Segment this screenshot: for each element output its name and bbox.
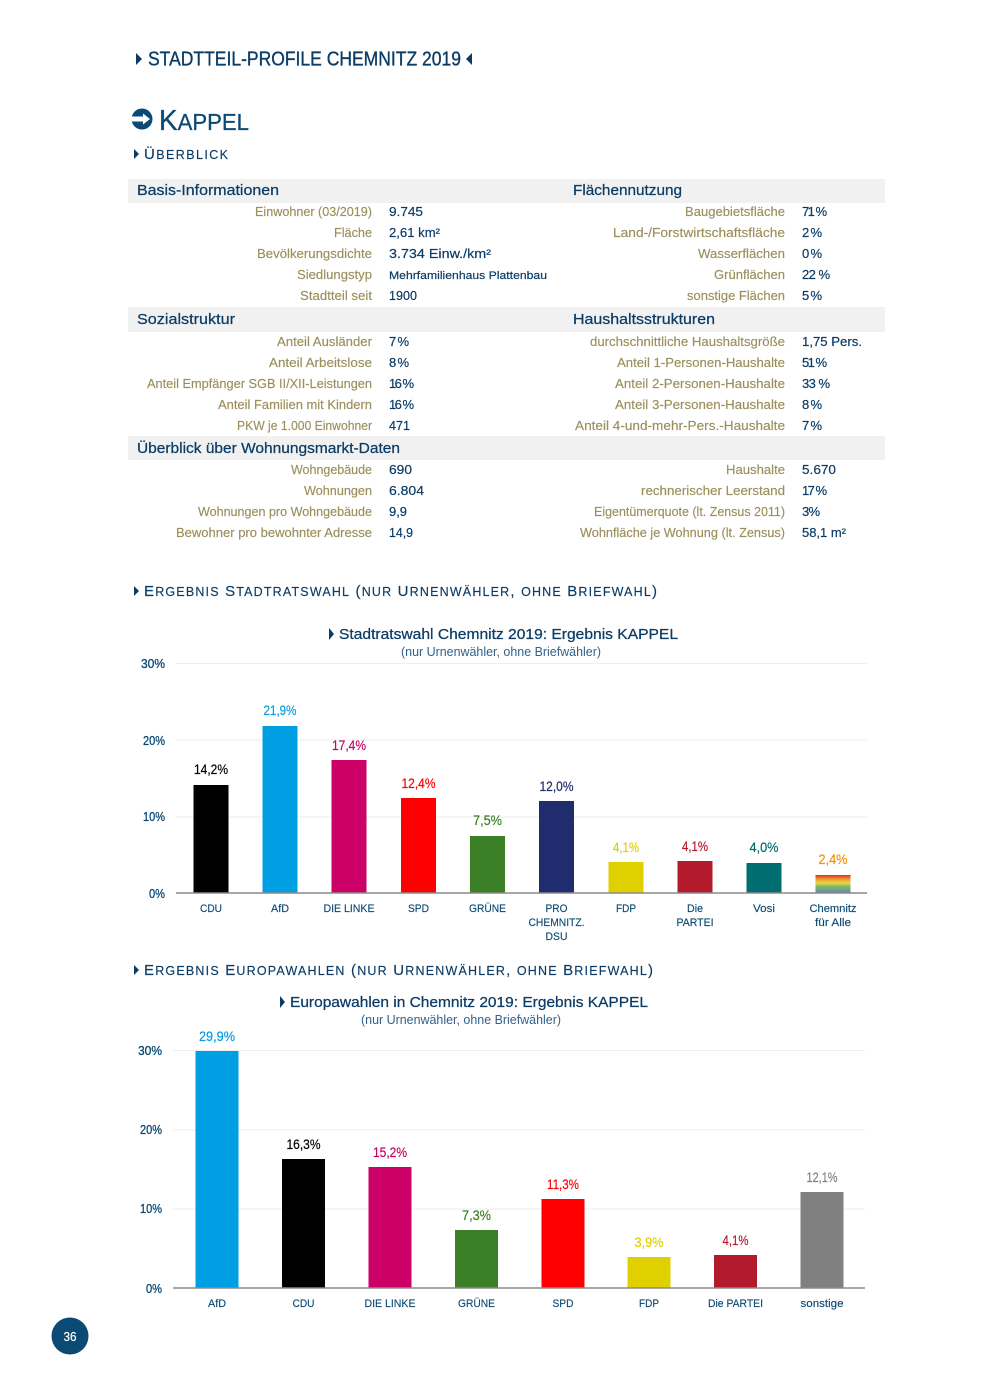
y axis and grid: 10% xyxy=(140,1202,162,1216)
table rows: Wohnungsmarkt left: 690 xyxy=(389,462,412,477)
y axis and grid: 10% xyxy=(143,810,165,824)
table rows: Haushaltsstrukturen xyxy=(575,334,862,433)
table rows: Wohnungsmarkt right: Haushalte xyxy=(726,463,785,477)
table rows: Flächennutzung: Grünflächen xyxy=(714,268,785,282)
table rows: Basis-Informationen: 9.745 xyxy=(389,204,423,219)
y axis and grid xyxy=(141,657,867,901)
category labels: für Alle xyxy=(815,917,851,929)
category labels: FDP xyxy=(639,1298,659,1310)
table rows: Flächennutzung: 22 % xyxy=(802,267,830,282)
table rows: Haushaltsstrukturen: Anteil 1-Personen-Haushalte xyxy=(617,356,785,370)
category labels: PARTEI xyxy=(676,917,714,929)
value labels: 29,9% xyxy=(199,1028,235,1044)
table rows: Basis-Informationen: Bevölkerungsdichte xyxy=(257,247,372,261)
category labels: SPD xyxy=(552,1298,574,1310)
chart title: Stadtratswahl xyxy=(329,626,678,659)
value labels: 17,4% xyxy=(332,737,366,753)
table band: Sozialstruktur and Haushaltsstrukturen: Sozialstruktur xyxy=(137,311,235,328)
value labels: 14,2% xyxy=(194,761,228,777)
table rows: Wohnungsmarkt left: Wohngebäude xyxy=(291,463,372,477)
category labels: CDU xyxy=(200,903,222,915)
table band: Überblick über Wohnungsmarkt-Daten xyxy=(128,436,885,460)
category labels xyxy=(208,1298,844,1310)
category labels: DIE LINKE xyxy=(364,1298,416,1310)
value labels: 12,4% xyxy=(402,775,436,791)
table rows: Flächennutzung: Land-/Forstwirtschaftsfläche xyxy=(613,226,785,240)
table rows: Haushaltsstrukturen: 8 % xyxy=(802,397,822,412)
table rows: Wohnungsmarkt right: rechnerischer Leerstand xyxy=(641,484,785,498)
y axis and grid: 30% xyxy=(141,657,165,671)
table rows: Wohnungsmarkt left: Wohnungen xyxy=(304,484,372,498)
table rows: Basis-Informationen: 2,61 km² xyxy=(389,225,441,240)
table rows: Wohnungsmarkt left xyxy=(176,462,424,540)
table rows: Haushaltsstrukturen: durchschnittliche Haushaltsgröße xyxy=(590,335,785,349)
y axis and grid: 30% xyxy=(138,1044,162,1058)
value labels: 2,4% xyxy=(818,851,848,867)
table rows: Sozialstruktur xyxy=(147,334,414,433)
table rows: Sozialstruktur: Anteil Arbeitslose xyxy=(269,356,372,370)
table rows: Basis-Informationen: Fläche xyxy=(334,226,372,240)
table rows: Basis-Informationen: Stadtteil seit xyxy=(300,289,373,303)
page number badge: 36 xyxy=(64,1330,77,1344)
table band: Basis-Informationen and Flächennutzung: Basis-Informationen xyxy=(137,182,279,199)
table rows: Sozialstruktur: 471 xyxy=(389,418,410,433)
value labels: 7,3% xyxy=(462,1207,491,1223)
y axis and grid: 0% xyxy=(146,1282,162,1296)
value labels: 4,1% xyxy=(682,838,708,854)
table rows: Basis-Informationen: 3.734 Einw./km² xyxy=(389,246,492,261)
category labels: Chemnitz xyxy=(810,903,856,915)
value labels xyxy=(194,702,848,867)
table rows: Sozialstruktur: 16 % xyxy=(389,376,414,391)
chart title: Stadtratswahl: (nur Urnenwähler, ohne Briefwähler) xyxy=(401,645,601,659)
table rows: Sozialstruktur: 7 % xyxy=(389,334,409,349)
category labels: AfD xyxy=(208,1298,226,1310)
y axis and grid: 20% xyxy=(140,1123,162,1137)
table rows: Sozialstruktur: 8 % xyxy=(389,355,409,370)
chart title: Europawahlen: Europawahlen in Chemnitz 2019: Ergebnis KAPPEL xyxy=(290,994,648,1011)
page title: STADTTEIL-PROFILE CHEMNITZ 2019 xyxy=(148,48,461,70)
district heading: Kappel: KAPPEL xyxy=(159,105,249,137)
category labels: CHEMNITZ. xyxy=(528,917,584,929)
y axis and grid: 0% xyxy=(149,887,165,901)
value labels: 7,5% xyxy=(473,812,502,828)
table rows: Flächennutzung: 71 % xyxy=(802,204,827,219)
bars xyxy=(173,1051,865,1288)
value labels: 12,1% xyxy=(806,1169,838,1185)
table rows: Wohnungsmarkt left: Bewohner pro bewohnter Adresse xyxy=(176,526,372,540)
value labels xyxy=(199,1028,838,1250)
table rows: Haushaltsstrukturen: 1,75 Pers. xyxy=(802,334,862,349)
value labels: 4,1% xyxy=(722,1232,748,1248)
table rows: Sozialstruktur: Anteil Ausländer xyxy=(277,335,372,349)
category labels: SPD xyxy=(408,903,429,915)
table rows: Flächennutzung: sonstige Flächen xyxy=(687,289,785,303)
category labels: AfD xyxy=(271,903,289,915)
category labels: PRO xyxy=(546,903,568,915)
table rows: Wohnungsmarkt right: 3 % xyxy=(802,504,820,519)
section heading: Ergebnis Stadtratswahl: ERGEBNIS STADTRATSWAHL (NUR URNENWÄHLER, OHNE BRIEFWAHL) xyxy=(144,583,657,600)
value labels: 11,3% xyxy=(547,1176,579,1192)
table band: Überblick über Wohnungsmarkt-Daten: Überblick über Wohnungsmarkt-Daten xyxy=(137,439,400,457)
chart title: Stadtratswahl: Stadtratswahl Chemnitz 2019: Ergebnis KAPPEL xyxy=(339,626,678,643)
table rows: Flächennutzung: 5 % xyxy=(802,288,822,303)
table rows: Sozialstruktur: 16 % xyxy=(389,397,414,412)
table rows: Wohnungsmarkt left: 14,9 xyxy=(389,525,413,540)
y axis and grid xyxy=(138,1044,865,1296)
table rows: Basis-Informationen: Einwohner (03/2019) xyxy=(255,205,372,219)
data table: overview xyxy=(128,179,885,540)
category labels: GRÜNE xyxy=(469,903,506,915)
table rows: Basis-Informationen: Mehrfamilienhaus Plattenbau xyxy=(389,270,547,282)
bars xyxy=(176,726,867,893)
category labels: DIE LINKE xyxy=(324,903,374,915)
table rows: Wohnungsmarkt left: Wohnungen pro Wohngebäude xyxy=(198,505,372,519)
value labels: 4,0% xyxy=(750,839,778,855)
table rows: Flächennutzung: Wasserflächen xyxy=(698,247,785,261)
table rows: Sozialstruktur: Anteil Familien mit Kindern xyxy=(218,398,372,412)
category labels: Die xyxy=(687,903,703,915)
table rows: Flächennutzung: 2 % xyxy=(802,225,822,240)
category labels: FDP xyxy=(616,903,636,915)
bar chart: Europawahlen xyxy=(138,1028,865,1310)
table rows: Flächennutzung: Baugebietsfläche xyxy=(685,205,785,219)
value labels: 16,3% xyxy=(286,1136,320,1152)
category labels: GRÜNE xyxy=(458,1298,495,1310)
table rows: Wohnungsmarkt right: 58,1 m² xyxy=(802,525,847,540)
table band: Sozialstruktur and Haushaltsstrukturen xyxy=(128,307,885,332)
table band: Basis-Informationen and Flächennutzung: Flächennutzung xyxy=(573,182,682,199)
table rows: Wohnungsmarkt left: 9,9 xyxy=(389,504,407,519)
bar chart: Stadtratswahl xyxy=(141,657,867,943)
table rows: Haushaltsstrukturen: 51 % xyxy=(802,355,827,370)
category labels: CDU xyxy=(292,1298,315,1310)
table rows: Haushaltsstrukturen: Anteil 4-und-mehr-Pers.-Haushalte xyxy=(575,419,785,433)
category labels: DSU xyxy=(546,931,568,943)
table rows: Sozialstruktur: Anteil Empfänger SGB II/XII-Leistungen xyxy=(147,377,372,391)
value labels: 12,0% xyxy=(540,778,574,794)
table rows: Basis-Informationen xyxy=(255,204,547,303)
table rows: Wohnungsmarkt right: 5.670 xyxy=(802,462,836,477)
table rows: Basis-Informationen: 1900 xyxy=(389,288,417,303)
section heading: Überblick: ÜBERBLICK xyxy=(144,145,229,163)
category labels: sonstige xyxy=(800,1298,844,1310)
table rows: Basis-Informationen: Siedlungstyp xyxy=(297,268,372,282)
table rows: Wohnungsmarkt right xyxy=(580,462,847,540)
table rows: Wohnungsmarkt left: 6.804 xyxy=(389,483,424,498)
category labels xyxy=(200,903,856,943)
table rows: Wohnungsmarkt right: 17 % xyxy=(802,483,827,498)
value labels: 15,2% xyxy=(373,1144,407,1160)
table rows: Sozialstruktur: PKW je 1.000 Einwohner xyxy=(237,419,372,433)
category labels: Die PARTEI xyxy=(708,1298,763,1310)
page number badge xyxy=(52,1318,88,1354)
table rows: Haushaltsstrukturen: Anteil 2-Personen-Haushalte xyxy=(615,377,785,391)
table rows: Flächennutzung xyxy=(613,204,830,303)
value labels: 21,9% xyxy=(264,702,296,718)
value labels: 3,9% xyxy=(634,1234,664,1250)
section heading: Ergebnis Europawahlen: ERGEBNIS EUROPAWAHLEN (NUR URNENWÄHLER, OHNE BRIEFWAHL) xyxy=(144,962,653,979)
table rows: Haushaltsstrukturen: 33 % xyxy=(802,376,830,391)
table band: Sozialstruktur and Haushaltsstrukturen: Haushaltsstrukturen xyxy=(573,311,715,328)
table rows: Wohnungsmarkt right: Wohnfläche je Wohnung (lt. Zensus) xyxy=(580,526,785,540)
category labels: Vosi xyxy=(753,903,775,915)
table rows: Haushaltsstrukturen: 7 % xyxy=(802,418,822,433)
table band: Basis-Informationen and Flächennutzung xyxy=(128,179,885,203)
table rows: Haushaltsstrukturen: Anteil 3-Personen-Haushalte xyxy=(615,398,785,412)
table rows: Flächennutzung: 0 % xyxy=(802,246,822,261)
table rows: Wohnungsmarkt right: Eigentümerquote (lt. Zensus 2011) xyxy=(594,505,785,519)
y axis and grid: 20% xyxy=(143,734,165,748)
chart title: Europawahlen: (nur Urnenwähler, ohne Briefwähler) xyxy=(361,1013,561,1027)
value labels: 4,1% xyxy=(613,839,639,855)
chart title: Europawahlen xyxy=(280,994,648,1027)
